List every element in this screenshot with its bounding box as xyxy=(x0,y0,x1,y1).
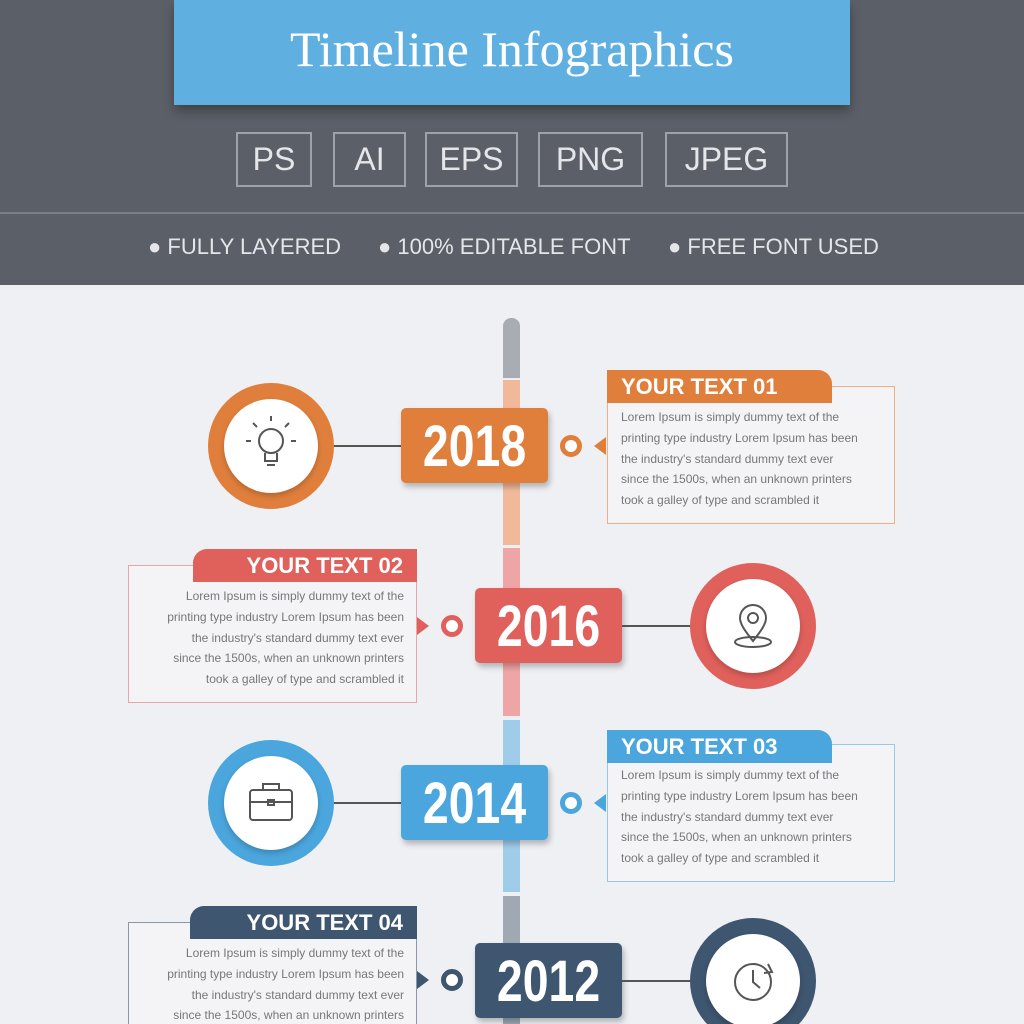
text box 01: since the 1500s, when an unknown printers xyxy=(621,472,852,486)
year 2012 xyxy=(475,943,622,1018)
header background xyxy=(0,0,1024,285)
row 4: 2012: YOUR TEXT 04 xyxy=(247,910,403,935)
text box 02: the industry's standard dummy text ever xyxy=(192,631,404,645)
title banner xyxy=(174,0,850,105)
text box 02: Lorem Ipsum is simply dummy text of the xyxy=(186,589,404,603)
feature bullets: ● FREE FONT USED xyxy=(668,234,879,259)
text box 01: printing type industry Lorem Ipsum has been xyxy=(621,431,858,445)
format badges: PNG xyxy=(556,141,625,177)
format badges: JPEG xyxy=(685,141,768,177)
text box 03: Lorem Ipsum is simply dummy text of the xyxy=(621,768,839,782)
row 2: 2016: YOUR TEXT 02 xyxy=(247,553,403,578)
year 2012: 2012 xyxy=(497,949,600,1014)
row 4: 2012 xyxy=(128,906,816,1024)
text box 01: Lorem Ipsum is simply dummy text of the xyxy=(621,410,839,424)
row 1: 2018: YOUR TEXT 01 xyxy=(621,374,777,399)
row 3: 2014 xyxy=(208,730,895,882)
icon: clock circle xyxy=(690,918,816,1024)
text box 03: since the 1500s, when an unknown printers xyxy=(621,830,852,844)
text box 02 xyxy=(128,565,417,703)
year 2014: 2014 xyxy=(423,771,526,836)
text box 04 xyxy=(128,922,417,1024)
text box 02: took a galley of type and scrambled it xyxy=(206,672,404,686)
year 2018: 2018 xyxy=(423,414,526,479)
year 2016: 2016 xyxy=(497,594,600,659)
text box 01 xyxy=(607,386,895,524)
title banner: Timeline Infographics xyxy=(290,21,734,77)
row 3: 2014: YOUR TEXT 03 xyxy=(621,734,777,759)
feature bullets: ● 100% EDITABLE FONT xyxy=(378,234,631,259)
text box 02: since the 1500s, when an unknown printers xyxy=(173,651,404,665)
text box 03: the industry's standard dummy text ever xyxy=(621,810,833,824)
text box 03: printing type industry Lorem Ipsum has been xyxy=(621,789,858,803)
text box 04: since the 1500s, when an unknown printers xyxy=(173,1008,404,1022)
icon: briefcase circle xyxy=(208,740,334,866)
text box 01: took a galley of type and scrambled it xyxy=(621,493,819,507)
row 2: 2016 xyxy=(128,549,816,703)
text box 01: the industry's standard dummy text ever xyxy=(621,452,833,466)
text box 03: took a galley of type and scrambled it xyxy=(621,851,819,865)
icon: lightbulb circle xyxy=(208,383,334,509)
year 2018 xyxy=(401,408,548,483)
icon: location pin circle xyxy=(690,563,816,689)
timeline spine xyxy=(503,318,520,1024)
format badges xyxy=(236,132,788,187)
format badges: EPS xyxy=(439,141,504,177)
text box 04: Lorem Ipsum is simply dummy text of the xyxy=(186,946,404,960)
year 2016 xyxy=(475,588,622,663)
feature bullets xyxy=(148,234,879,259)
text box 04: printing type industry Lorem Ipsum has been xyxy=(167,967,404,981)
feature bullets: ● FULLY LAYERED xyxy=(148,234,341,259)
row 1: 2018 xyxy=(208,370,895,524)
format badges: PS xyxy=(253,141,295,177)
text box 02: printing type industry Lorem Ipsum has been xyxy=(167,610,404,624)
text box 04: the industry's standard dummy text ever xyxy=(192,988,404,1002)
format badges: AI xyxy=(354,141,385,177)
year 2014 xyxy=(401,765,548,840)
text box 03 xyxy=(607,744,895,882)
